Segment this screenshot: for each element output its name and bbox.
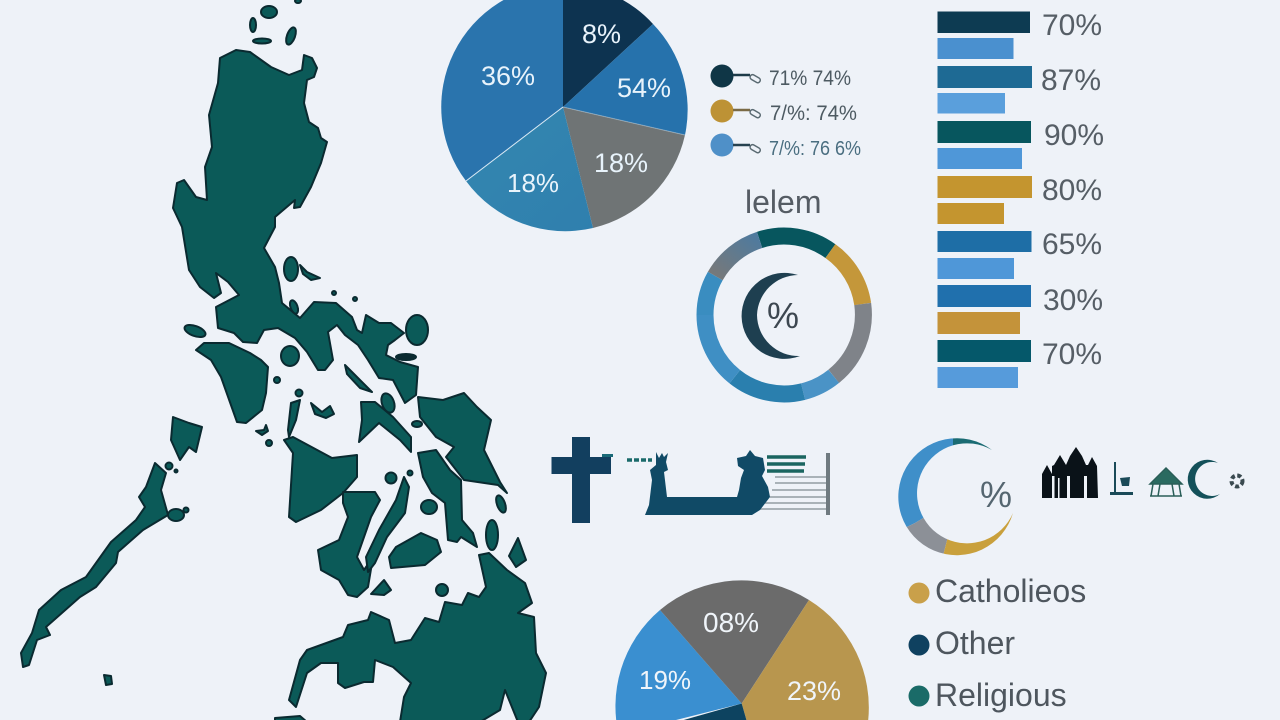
silhouette [645, 450, 770, 515]
icon: star gear [1232, 476, 1242, 486]
legend row: gold: 7/%: 74% [770, 102, 857, 125]
legend item: Catholics: Catholieos [935, 573, 1086, 609]
icon: Christian cross [552, 437, 613, 523]
bottom pie chart [615, 580, 869, 720]
segment: grey blue [715, 240, 760, 276]
bar labels [1041, 9, 1104, 371]
slice: grey [660, 580, 809, 704]
pie labels: 18% [507, 168, 559, 198]
legend row: blue: 7/%: 76 6% [769, 138, 861, 160]
bar labels: 90% [1044, 119, 1104, 152]
slice: gold [742, 600, 869, 720]
bar labels: 70% [1042, 338, 1102, 371]
segment: blue upper [705, 276, 715, 315]
dashes [627, 458, 652, 462]
segment: grey [834, 304, 863, 376]
legend row: navy: 71% 74% [769, 67, 851, 90]
icon: crescent moon [1188, 460, 1220, 499]
segment: grey [906, 518, 948, 554]
bar labels: 87% [1041, 64, 1101, 97]
icon: church silhouette with stripes [627, 450, 830, 515]
segment: teal [953, 438, 992, 450]
island: Mindanao [289, 553, 546, 720]
pie labels [639, 607, 841, 706]
pie labels [481, 19, 671, 198]
pie labels: 18% [594, 148, 648, 178]
segment: light blue [803, 376, 834, 392]
crescent ring chart [898, 438, 1013, 556]
segment: gold [830, 251, 863, 304]
island: Samar [418, 393, 507, 493]
top pie chart [441, 0, 688, 231]
bar chart [938, 9, 1104, 388]
slice: blue [615, 610, 742, 720]
legend item: Religious: Religious [935, 677, 1067, 713]
island: Palawan north [171, 417, 202, 460]
island: Cebu strip [366, 477, 409, 572]
island: Mindoro [196, 343, 268, 423]
bar labels: 80% [1042, 174, 1102, 207]
island: central west [318, 492, 380, 597]
pie labels: 19% [639, 665, 691, 695]
slice: navy [563, 0, 653, 107]
pie labels: 36% [481, 61, 535, 91]
island: Luzon [173, 50, 418, 403]
icon: donut crescent [742, 273, 800, 359]
island: Palawan [21, 463, 168, 667]
legend row: navy [710, 64, 851, 90]
dark stripes [767, 457, 806, 471]
island: Bohol [389, 533, 441, 568]
icon: pavilion [1150, 468, 1182, 496]
donut percent sign: % [767, 295, 799, 336]
key legend with pins [710, 64, 861, 160]
icon: minaret [1110, 462, 1133, 495]
icon: temple silhouette [1042, 447, 1098, 498]
segment: blue [735, 377, 803, 394]
island: Negros [284, 437, 357, 522]
bars [938, 12, 1032, 388]
slice: grey [563, 107, 685, 228]
legend row: gold [710, 100, 857, 125]
pie labels: 8% [582, 19, 621, 49]
map of the Philippines [21, 0, 546, 720]
donut heading: lelem [745, 184, 821, 220]
slice: large blue [441, 0, 563, 181]
slice: blue right [563, 24, 688, 135]
segment: teal [760, 236, 830, 251]
segment: blue [898, 438, 953, 527]
pie labels: 08% [703, 607, 759, 638]
religion legend [908, 573, 1086, 713]
pie labels: 23% [787, 676, 841, 706]
bar labels: 65% [1042, 228, 1102, 261]
stripes [760, 477, 826, 509]
segment: mid blue [705, 315, 735, 377]
segment: gold [944, 513, 1013, 556]
bar labels: 70% [1042, 9, 1102, 42]
legend row: blue [710, 134, 861, 160]
Islam donut chart [705, 236, 863, 394]
island: Panay [359, 402, 411, 452]
pie labels: 54% [617, 73, 671, 103]
legend item: Other: Other [935, 625, 1015, 661]
slice: teal blue [466, 107, 593, 231]
bar labels: 30% [1043, 284, 1103, 317]
slice separators [466, 107, 685, 181]
small islets [104, 0, 526, 720]
island: Leyte [418, 450, 477, 547]
crescent percent sign: % [980, 474, 1012, 515]
slice: navy [677, 704, 747, 720]
